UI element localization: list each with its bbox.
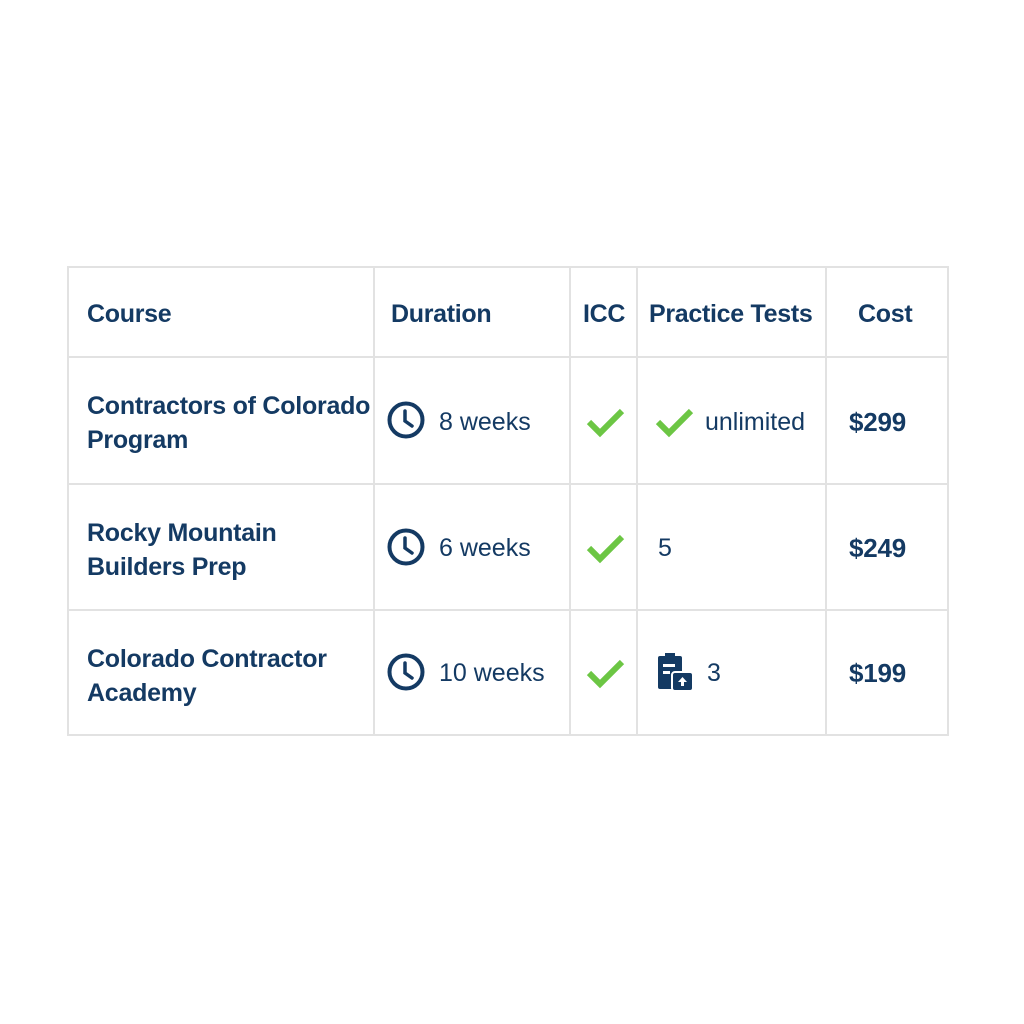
table: $299 bbox=[849, 407, 906, 437]
icon: clipboard test bbox=[658, 653, 692, 690]
table: Builders Prep bbox=[87, 553, 246, 581]
row 3 bbox=[87, 645, 906, 707]
table: unlimited bbox=[705, 408, 805, 436]
table: Course bbox=[87, 300, 171, 328]
table: Duration bbox=[391, 300, 491, 328]
table: 3 bbox=[707, 659, 721, 687]
table: Contractors of Colorado bbox=[87, 392, 370, 420]
table: 10 weeks bbox=[439, 659, 545, 687]
row 2 bbox=[87, 519, 906, 581]
table: 5 bbox=[658, 534, 672, 562]
table: Academy bbox=[87, 679, 196, 707]
table: $199 bbox=[849, 658, 906, 688]
row 1 bbox=[87, 392, 906, 454]
header row bbox=[87, 300, 912, 328]
table: Rocky Mountain bbox=[87, 519, 277, 547]
table: $249 bbox=[849, 533, 906, 563]
table: Cost bbox=[858, 300, 912, 328]
table: ICC bbox=[583, 300, 625, 328]
table: Colorado Contractor bbox=[87, 645, 327, 673]
table: 6 weeks bbox=[439, 534, 531, 562]
table: Program bbox=[87, 426, 188, 454]
table: Practice Tests bbox=[649, 300, 812, 328]
table: 8 weeks bbox=[439, 408, 531, 436]
